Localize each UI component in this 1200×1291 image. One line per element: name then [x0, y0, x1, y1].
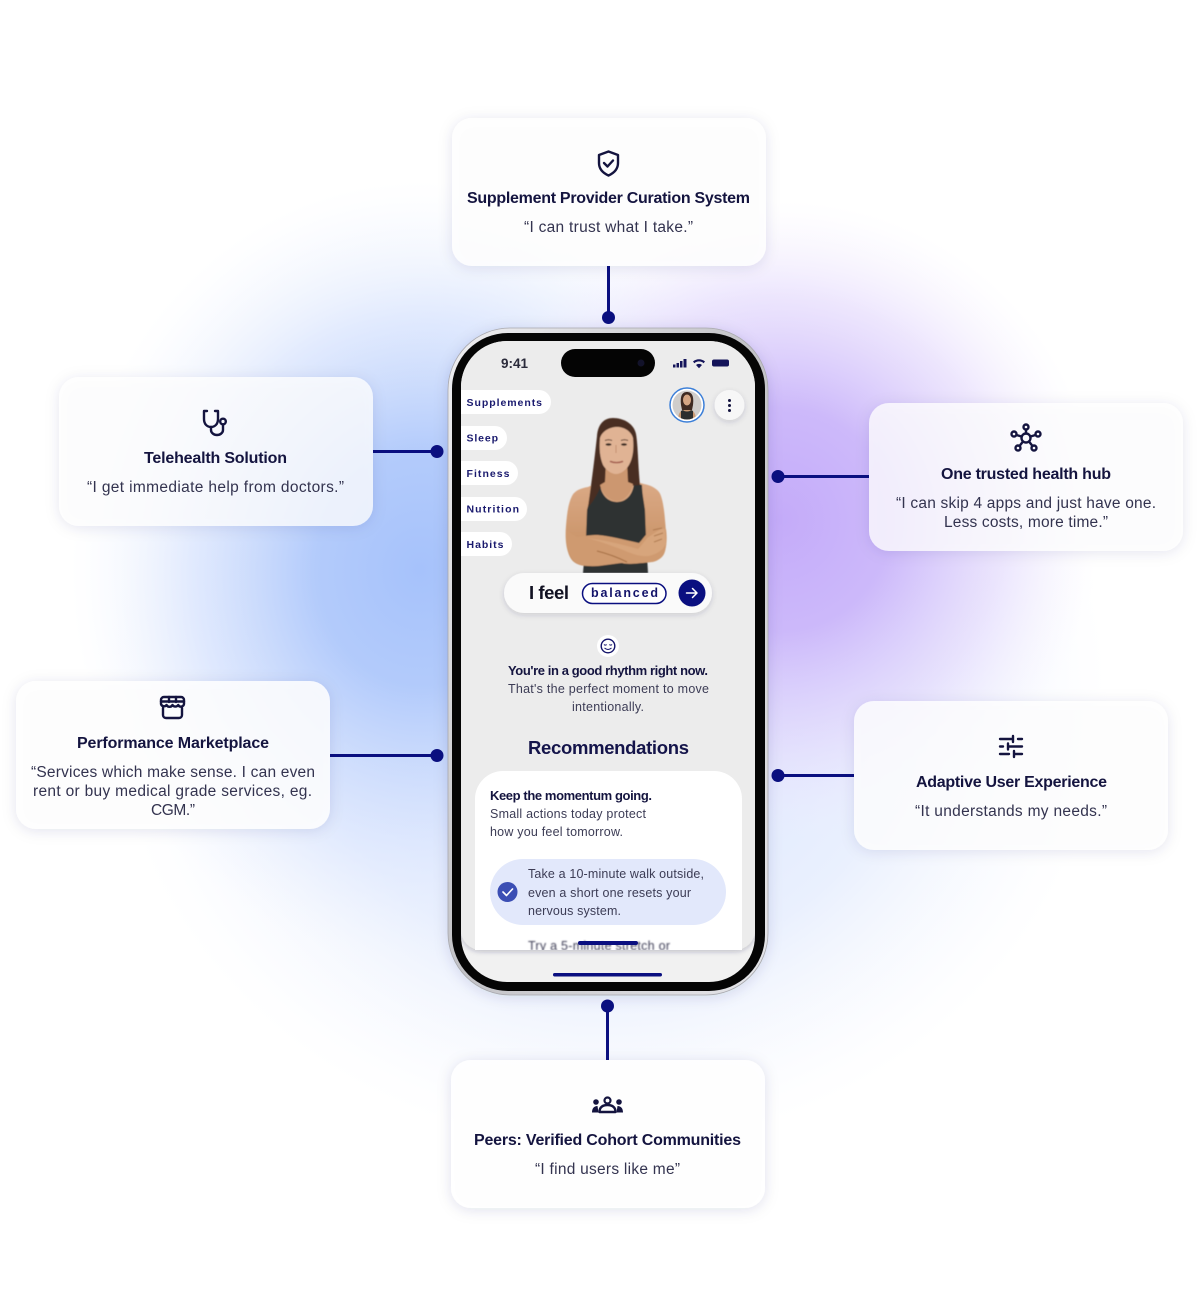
- card: Adaptive User Experience: “It understands my needs.”: [915, 803, 1107, 820]
- card: Performance Marketplace: CGM.”: [151, 802, 195, 819]
- phone: [440, 328, 768, 995]
- card: One trusted health hub: Less costs, more time.”: [944, 514, 1108, 531]
- mood message: intentionally.: [572, 700, 644, 714]
- tag: Supplements: Supplements: [466, 397, 542, 409]
- mood message: You're in a good rhythm right now.: [508, 663, 708, 678]
- forearms crossed: [566, 529, 667, 566]
- icon: shield check: [599, 152, 618, 176]
- icon: calm face: [597, 635, 619, 657]
- card: Telehealth Solution: Telehealth Solution: [144, 450, 287, 467]
- portrait: woman with crossed arms: [566, 418, 667, 573]
- card: Supplement Provider Curation System: [452, 118, 766, 266]
- tag: Fitness: Fitness: [466, 468, 510, 480]
- feeling selector: [504, 573, 712, 613]
- mood message: [508, 663, 709, 714]
- phone frame: [448, 328, 768, 995]
- neck: [600, 462, 633, 501]
- tag: Habits: Habits: [466, 539, 504, 551]
- avatar: [670, 388, 704, 422]
- card: Telehealth Solution: [59, 377, 373, 526]
- card: Adaptive User Experience: [854, 701, 1168, 850]
- feeling selector: I feel: [529, 582, 569, 603]
- recommendation card: Try a 5-minute stretch or: [528, 939, 670, 953]
- tag: Sleep: Sleep: [466, 432, 498, 444]
- recommendation item: nervous system.: [528, 904, 621, 918]
- icon: sliders: [1000, 736, 1022, 757]
- icon: network hub: [1012, 424, 1040, 450]
- home indicator: [553, 973, 662, 976]
- icon: storefront: [161, 697, 184, 718]
- card: Peers: Verified Cohort Communities: [451, 1060, 765, 1208]
- card: Supplement Provider Curation System: Supplement Provider Curation System: [467, 190, 750, 207]
- connector: health hub card to phone: [772, 470, 869, 483]
- status bar: time: 9:41: [501, 356, 528, 371]
- card: Adaptive User Experience: Adaptive User Experience: [916, 774, 1107, 791]
- connector: adaptive card to phone: [772, 769, 854, 782]
- card: Performance Marketplace: [16, 681, 330, 829]
- heading: Recommendations: Recommendations: [528, 737, 689, 758]
- recommendation card: Small actions today protect: [490, 807, 647, 821]
- recommendation item: Take a 10-minute walk outside,: [528, 867, 704, 881]
- card: One trusted health hub: [869, 403, 1183, 551]
- card: Peers: Verified Cohort Communities: Peers: Verified Cohort Communities: [474, 1132, 741, 1149]
- tag: Fitness: [461, 461, 518, 485]
- torso and arms base: [566, 478, 666, 566]
- recommendation card: Keep the momentum going.: [490, 788, 652, 803]
- recommendation card: how you feel tomorrow.: [490, 825, 623, 839]
- connector: marketplace card to phone: [330, 749, 444, 762]
- face: [600, 427, 633, 474]
- tag: Nutrition: Nutrition: [466, 504, 519, 516]
- connector: supplement card to phone: [602, 266, 615, 324]
- recommendation item: even a short one resets your: [528, 886, 691, 900]
- card: Performance Marketplace: rent or buy medical grade services, eg.: [33, 783, 312, 800]
- card: Telehealth Solution: “I get immediate help from doctors.”: [87, 479, 344, 496]
- card: Supplement Provider Curation System: “I can trust what I take.”: [524, 219, 693, 236]
- feeling selector: balanced: [591, 586, 658, 600]
- dynamic island: [561, 349, 655, 377]
- card: Peers: Verified Cohort Communities: “I find users like me”: [535, 1161, 680, 1178]
- icon: stethoscope: [204, 411, 226, 435]
- card: Performance Marketplace: Performance Marketplace: [77, 735, 269, 752]
- recommendation card: [475, 771, 742, 953]
- tag: Nutrition: [461, 497, 527, 521]
- mood message: That's the perfect moment to move: [508, 682, 709, 696]
- eyes, nose, mouth: [606, 443, 627, 446]
- tag: Supplements: [461, 390, 551, 414]
- card: One trusted health hub: “I can skip 4 apps and just have one.: [896, 495, 1156, 512]
- connector: telehealth card to phone: [373, 445, 444, 458]
- status icons: [673, 359, 729, 368]
- hair: [588, 418, 640, 507]
- phone screen: [440, 341, 755, 982]
- tag: Sleep: [461, 426, 507, 450]
- tag: Habits: [461, 532, 512, 556]
- card: Performance Marketplace: “Services which make sense. I can even: [31, 764, 315, 781]
- connector: peers card to phone: [601, 1000, 614, 1060]
- recommendation item: [490, 859, 726, 925]
- more button: [714, 390, 744, 420]
- card: One trusted health hub: One trusted health hub: [941, 466, 1111, 483]
- icon: community group: [592, 1098, 623, 1112]
- tank top: [583, 483, 648, 573]
- sheet handle: [578, 941, 638, 945]
